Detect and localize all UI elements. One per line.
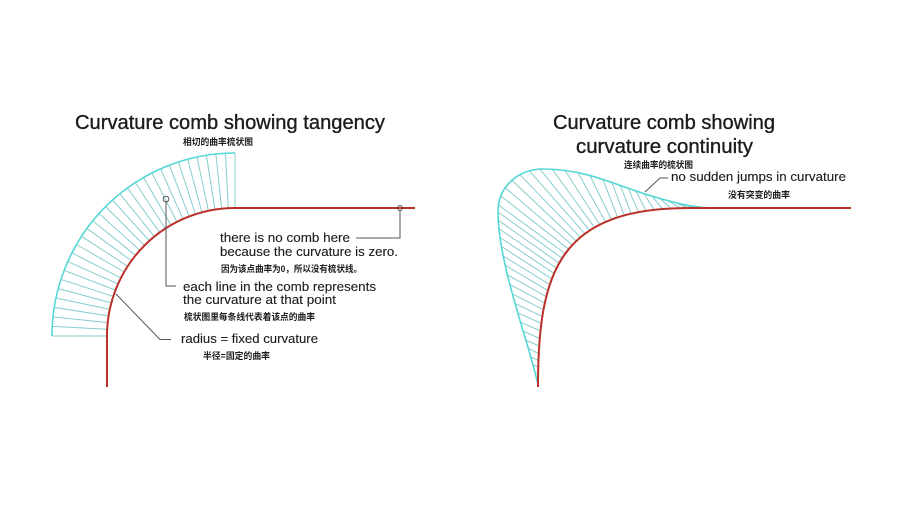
annotation: radius: 半径=固定的曲率 <box>203 350 270 361</box>
title: continuity: curvature continuity <box>576 136 753 158</box>
red curve: continuity <box>538 208 851 387</box>
leader: no sudden jumps <box>645 178 668 192</box>
comb outline: tangency <box>52 153 235 336</box>
panel: tangency <box>52 112 415 387</box>
annotation: no comb here: because the curvature is zero. <box>220 244 398 259</box>
leader: no comb here <box>356 206 402 238</box>
annotation: no comb here: 因为该点曲率为0，所以没有梳状线。 <box>221 263 362 274</box>
leader: radius <box>116 294 171 340</box>
chinese annotation: no sudden jumps: 没有突变的曲率 <box>728 189 790 200</box>
annotation: each comb line <box>183 279 377 322</box>
red curve: tangency <box>107 208 415 387</box>
comb teeth: tangency <box>52 153 235 336</box>
title: tangency: Curvature comb showing tangency <box>75 112 385 134</box>
comb outline: continuity <box>498 169 715 385</box>
comb teeth: continuity <box>498 169 696 374</box>
panel: continuity <box>498 112 851 387</box>
annotation: each comb line: 梳状图里每条线代表着该点的曲率 <box>184 311 315 322</box>
annotation: no sudden jumps: no sudden jumps in curvature <box>671 169 846 184</box>
leader: each comb line <box>163 196 176 286</box>
chinese title: continuous comb: 连续曲率的梳状图 <box>624 159 693 170</box>
annotation: no comb here <box>220 230 398 274</box>
annotation: each comb line: each line in the comb represents <box>183 279 377 294</box>
chinese title: tangency comb: 相切的曲率梳状图 <box>183 136 253 147</box>
annotation: no comb here: there is no comb here <box>220 230 350 245</box>
title: continuity <box>553 112 775 158</box>
annotation: each comb line: the curvature at that point <box>183 292 336 307</box>
annotation: radius: radius = fixed curvature <box>181 331 318 346</box>
title: continuity: Curvature comb showing <box>553 112 775 134</box>
annotation: radius <box>181 331 318 361</box>
